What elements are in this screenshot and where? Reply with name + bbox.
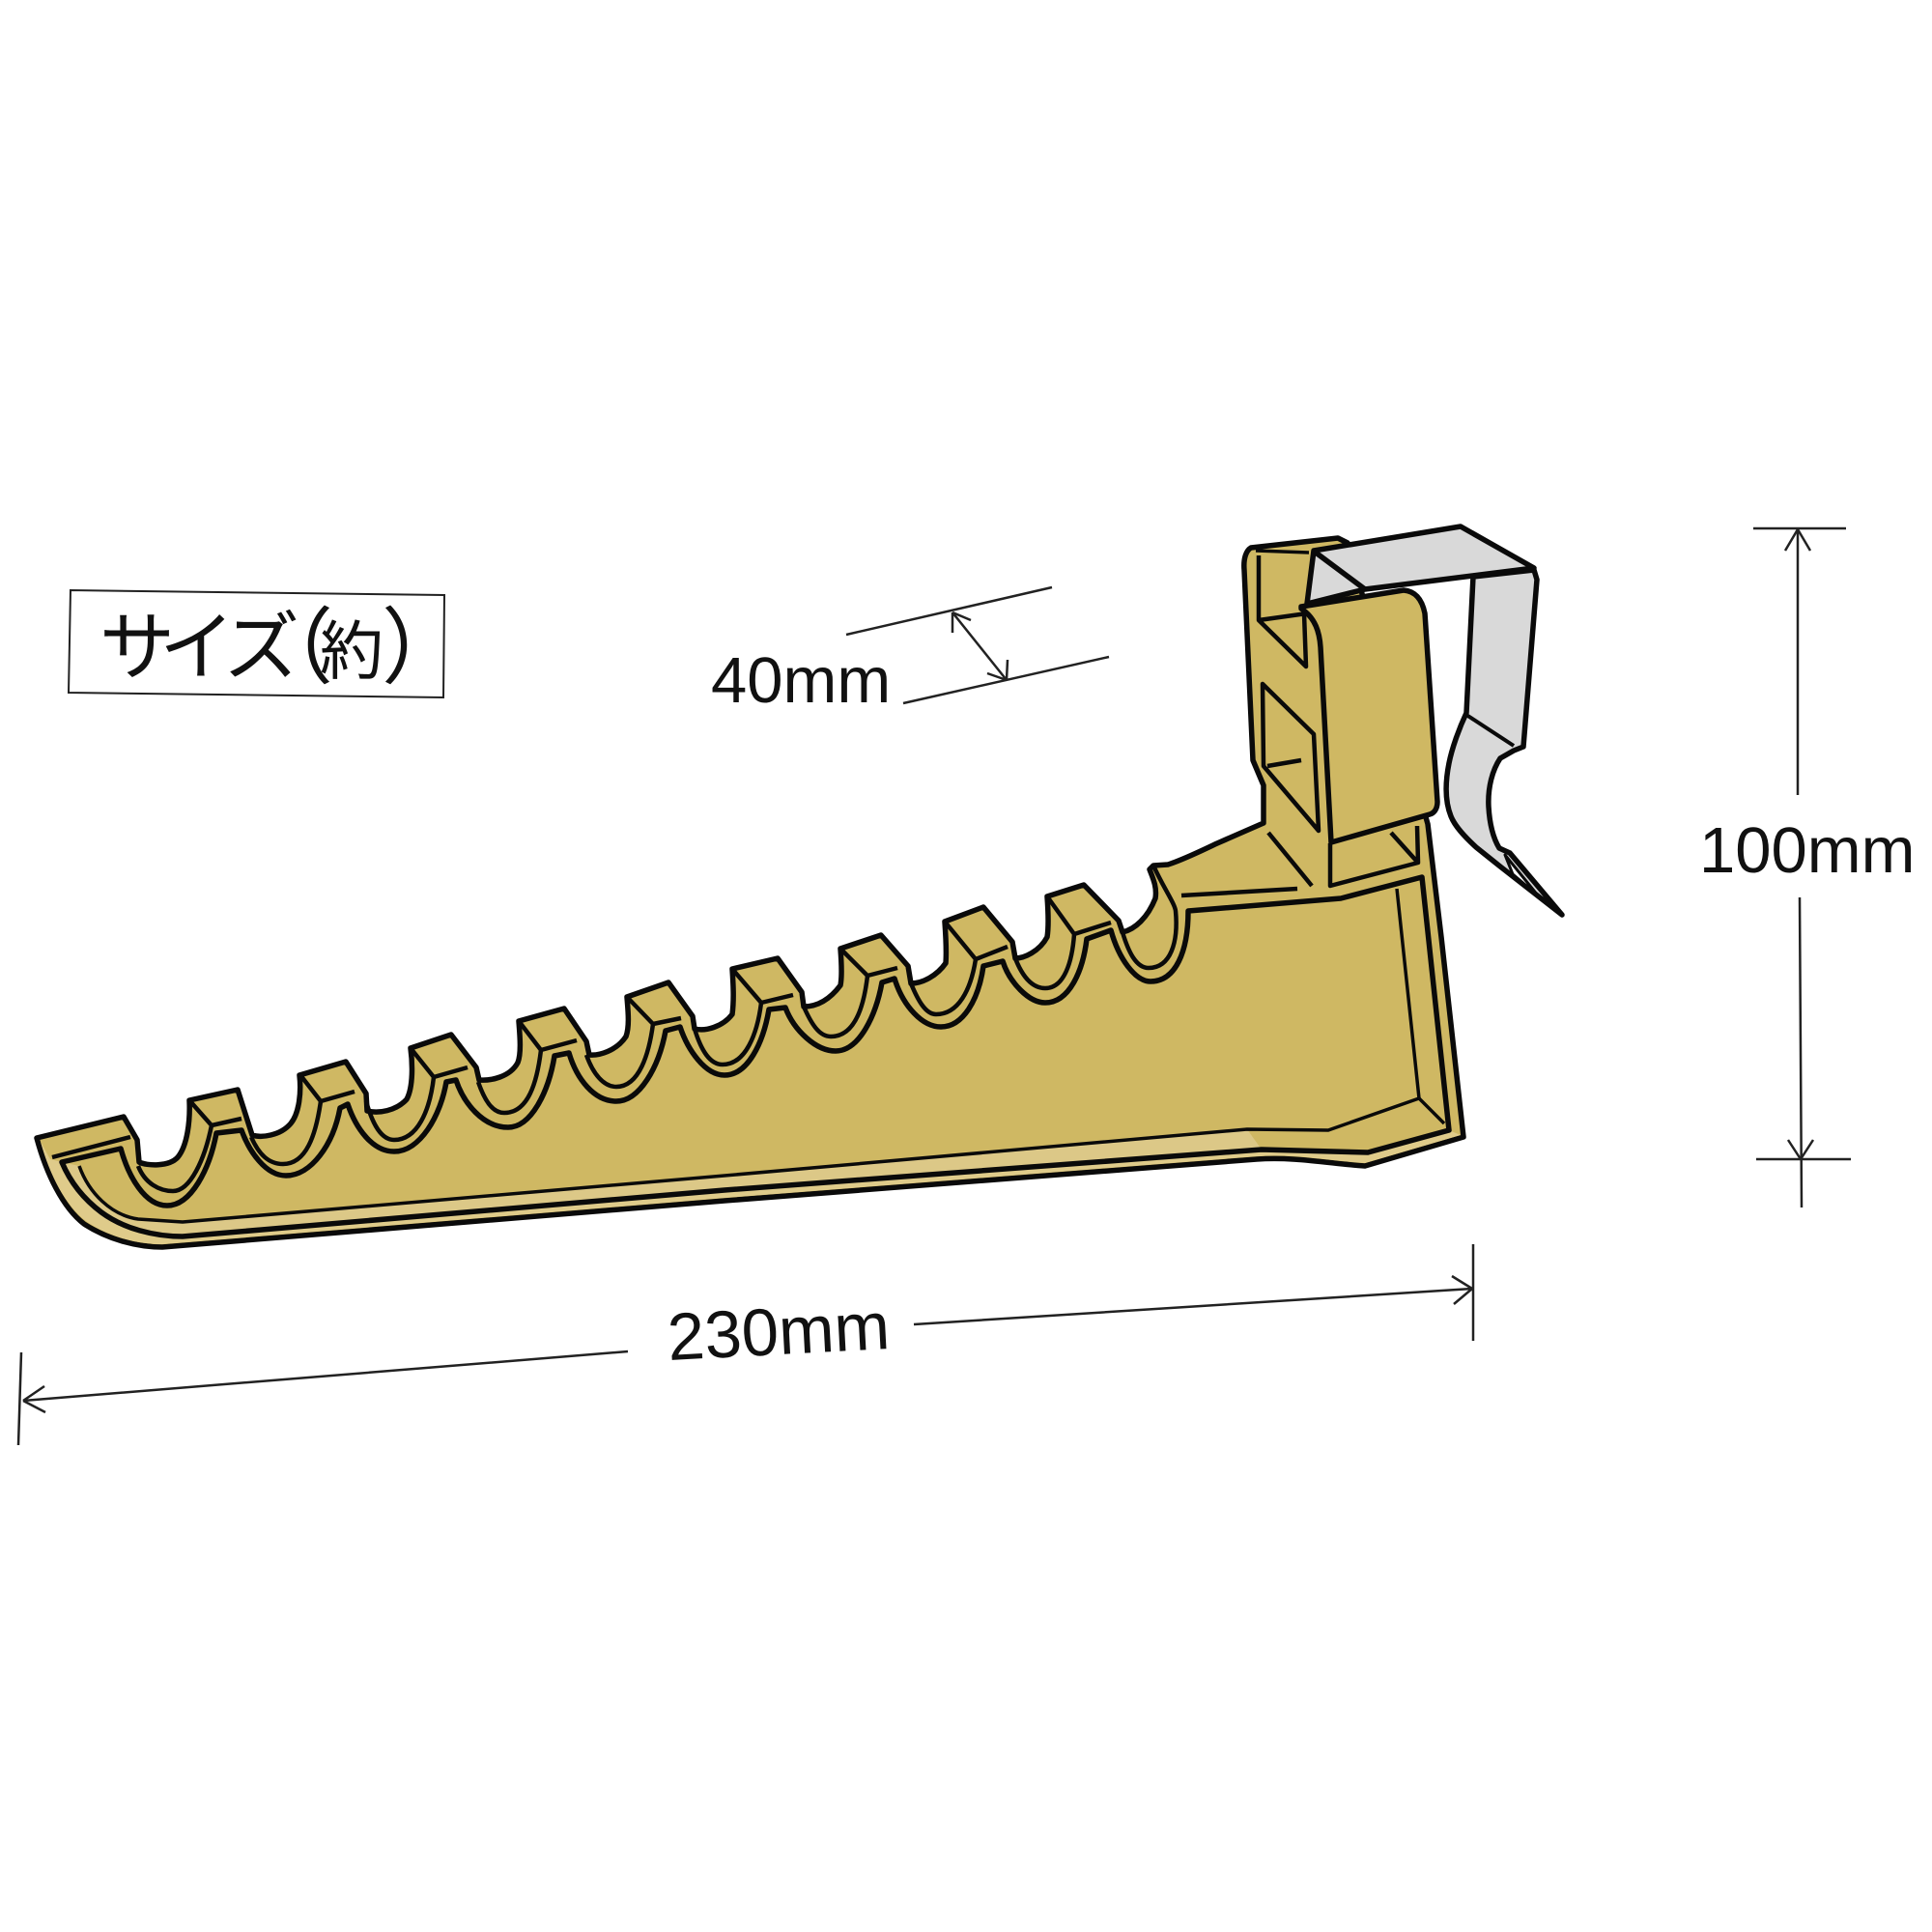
dimension: 230mm width	[18, 1244, 1473, 1445]
outer rim highlight band	[41, 1130, 1461, 1244]
inner rim highlight band	[62, 1129, 1262, 1236]
size label box: （	[250, 602, 333, 695]
icon: metal hook clip rear	[1446, 570, 1562, 915]
dimension: 100mm height	[1699, 528, 1915, 1208]
upright post details	[1181, 551, 1418, 895]
dimension: 230mm width: 230mm	[666, 1289, 892, 1375]
bracket body with teeth	[37, 538, 1463, 1247]
tooth ledges and scoop curves	[52, 866, 1177, 1191]
dimension: 40mm depth	[711, 587, 1109, 717]
dimension: 40mm depth: 40mm	[711, 644, 891, 717]
size label box: ）	[382, 602, 465, 695]
dimension: 100mm height: 100mm	[1699, 814, 1915, 887]
inner frame lines	[62, 877, 1449, 1236]
bracket front plate	[1301, 590, 1437, 842]
size label box	[69, 590, 465, 697]
size label box: 約	[320, 615, 384, 687]
icon: metal clip top	[1307, 526, 1534, 604]
size label box: サイズ	[99, 605, 299, 690]
